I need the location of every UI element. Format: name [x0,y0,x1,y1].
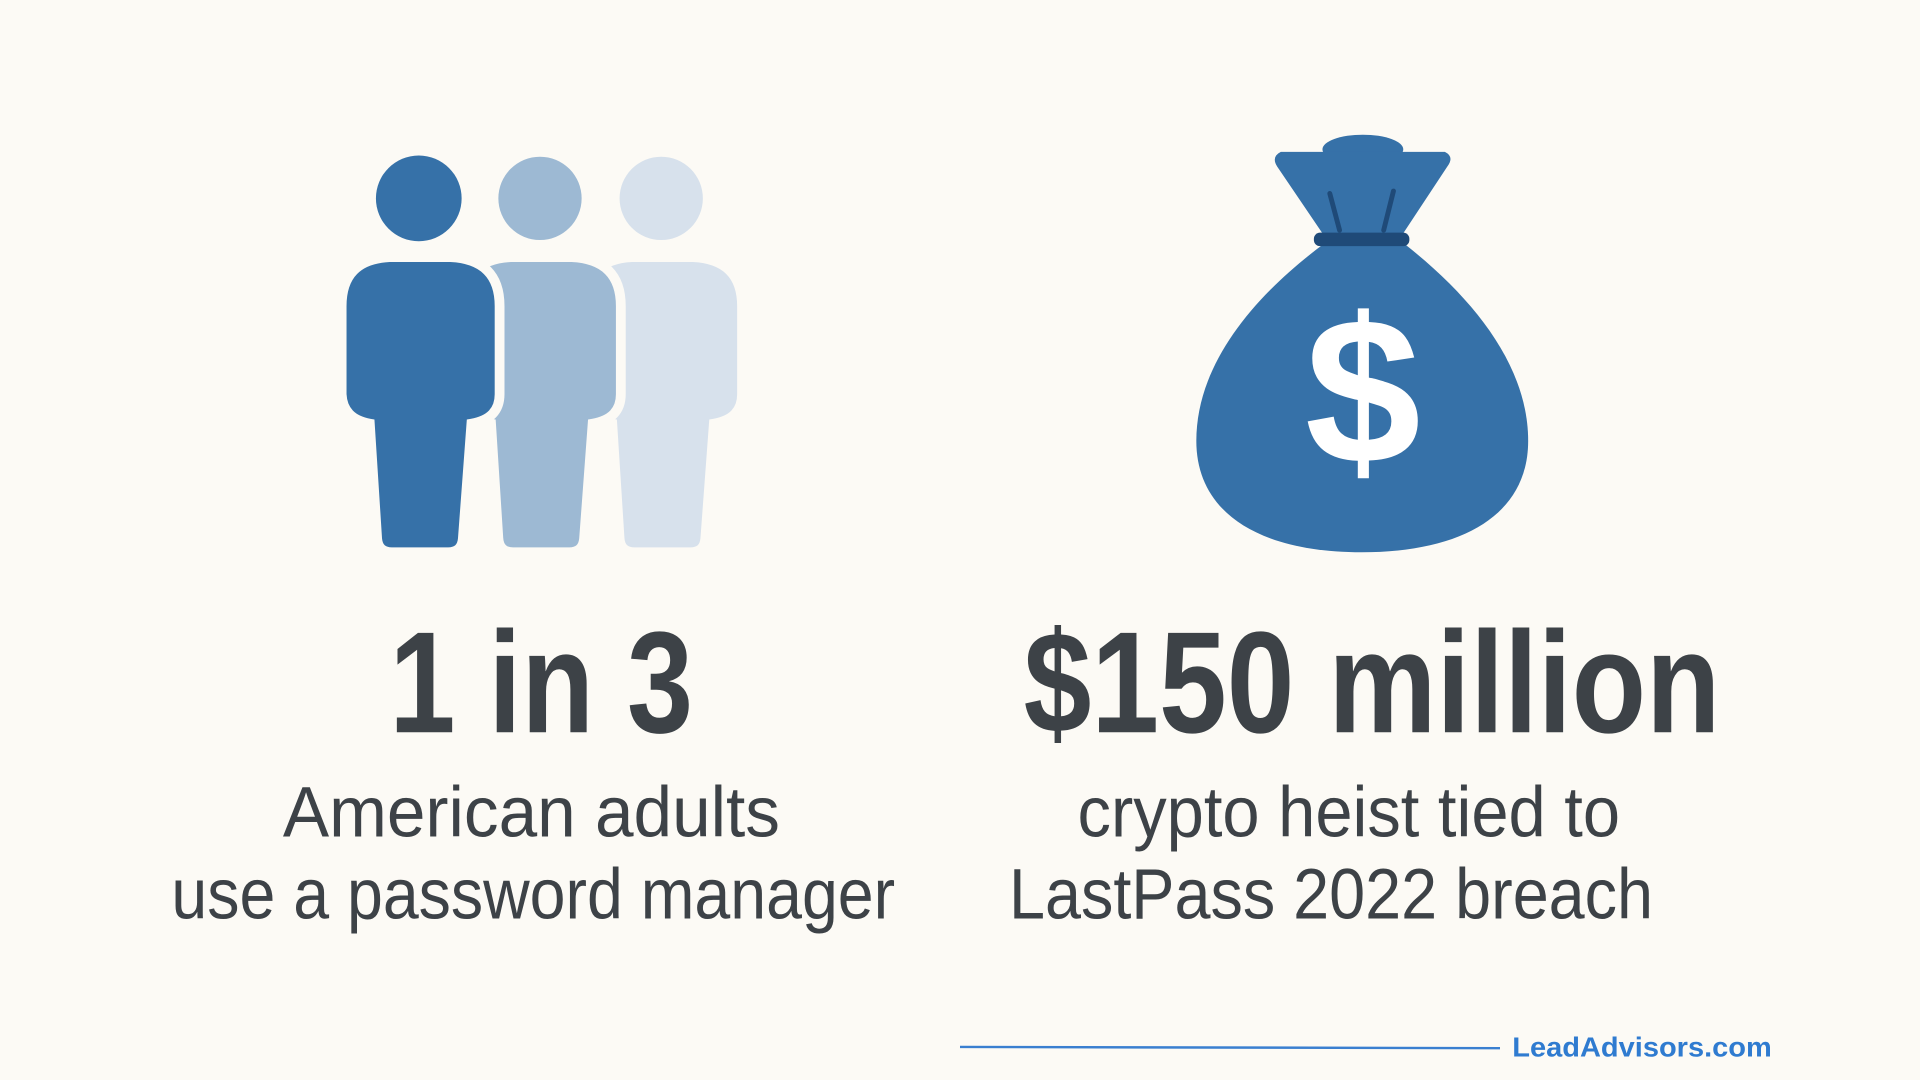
icon: money bag: $ [1305,276,1421,508]
text block: American adults: American adults [283,773,780,852]
stat: $150 million: $150 million [1024,601,1720,763]
text block: crypto heist: crypto heist tied to [1078,773,1620,852]
icon: money bag [1196,135,1528,552]
person mid [463,157,621,552]
text block: crypto heist [1009,773,1653,934]
text block: crypto heist: LastPass 2022 breach [1009,855,1653,934]
text block: American adults [171,773,895,934]
person dark [342,156,500,552]
stat: 1 in 3: 1 in 3 [389,601,693,763]
text block: American adults: use a password manager [171,855,895,934]
footer brand: LeadAdvisors.com [1512,1032,1772,1063]
icon: three people [342,156,742,552]
person light [584,157,742,552]
footer line [960,1047,1500,1048]
